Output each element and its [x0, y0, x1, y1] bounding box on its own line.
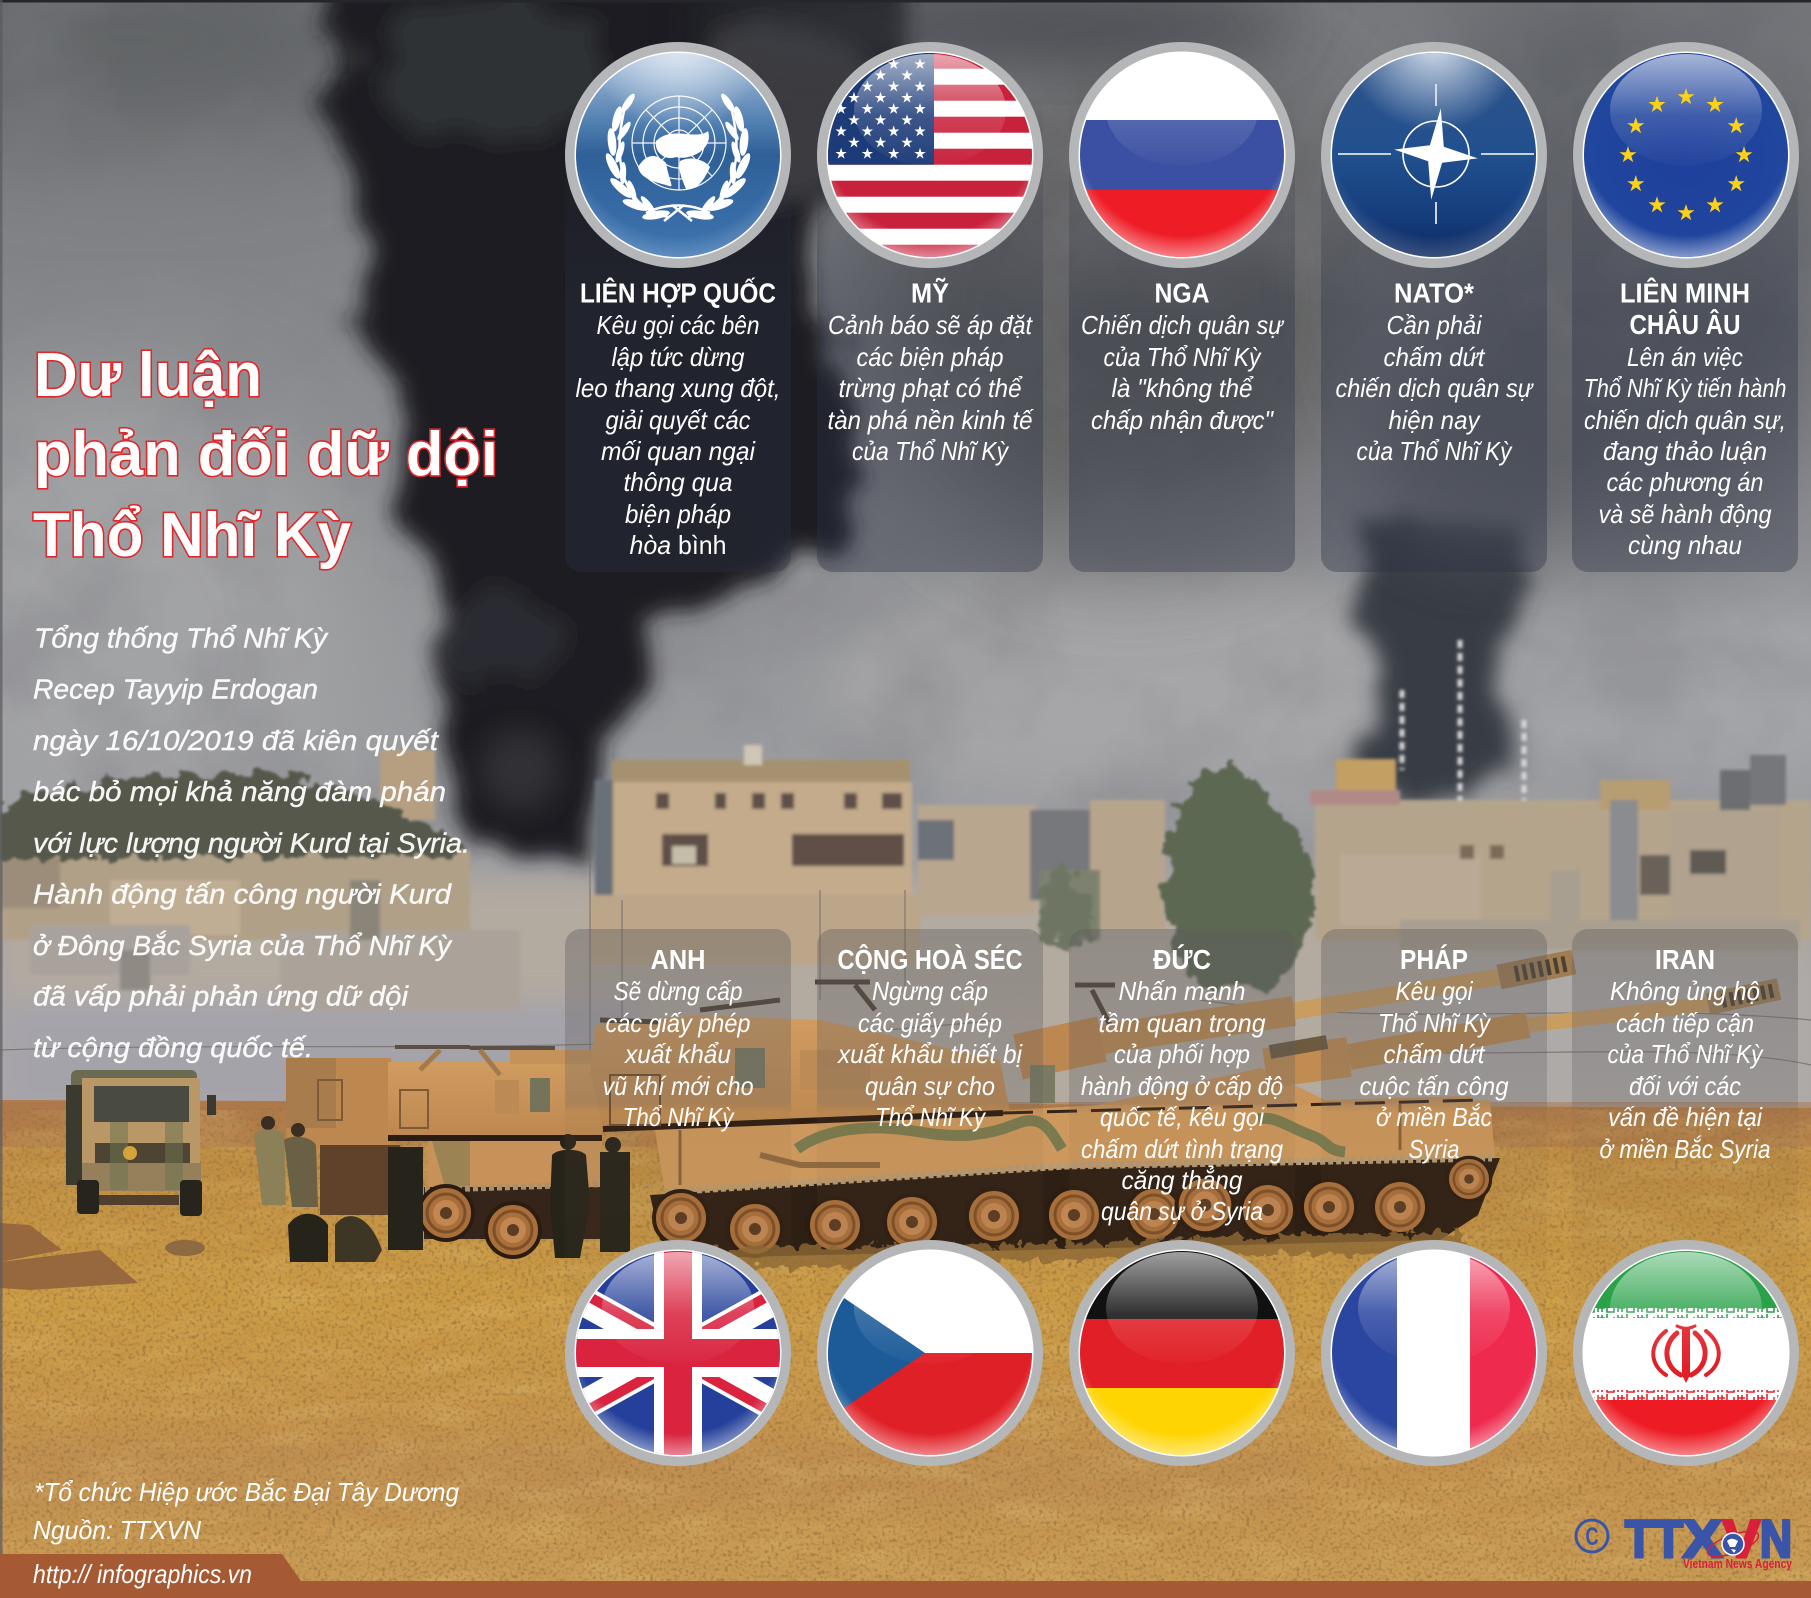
intro text block: Recep Tayyip Erdogan	[33, 674, 318, 705]
text block: tàn phá nền kinh tế	[828, 405, 1034, 435]
icon: Iran flag	[1573, 1240, 1799, 1466]
footer bar with website	[0, 1554, 1811, 1598]
text block	[828, 310, 1034, 466]
text block: leo thang xung đột,	[576, 373, 780, 403]
heading: ANH	[650, 944, 706, 975]
title: Dư luận	[34, 341, 262, 410]
text block	[576, 310, 780, 560]
intro text block: Tổng thống Thổ Nhĩ Kỳ	[34, 622, 329, 654]
logo: TTXVN Vietnam News Agency: X	[1683, 1510, 1722, 1569]
text block: của Thổ Nhĩ Kỳ	[1104, 342, 1262, 372]
text block: hiện nay	[1388, 405, 1481, 435]
text block: Ngừng cấp	[872, 976, 988, 1006]
heading: CHÂU ÂU	[1630, 309, 1740, 340]
intro text block: Hành động tấn công người Kurd	[33, 878, 452, 910]
text block: mối quan ngại	[601, 436, 756, 466]
text block: của Thổ Nhĩ Kỳ	[852, 436, 1010, 466]
foreground tanks	[590, 962, 1779, 1258]
icon: UK flag	[565, 1240, 791, 1466]
truck	[66, 1070, 216, 1216]
far town	[0, 880, 1811, 1120]
text block: thông qua	[624, 467, 732, 497]
text block: Lên án việc	[1627, 342, 1743, 372]
icon: US flag	[817, 42, 1043, 268]
text block: hành động ở cấp độ	[1081, 1071, 1283, 1101]
tarps	[0, 1223, 138, 1290]
text block: xuất khẩu	[623, 1039, 731, 1069]
text block	[1081, 310, 1284, 435]
logo: TTXVN Vietnam News Agency: C	[1586, 1523, 1598, 1551]
title: phản đối dữ dội	[34, 420, 498, 489]
text block: Cần phải	[1386, 310, 1483, 340]
icon: France flag	[1321, 1240, 1547, 1466]
soldiers	[254, 1116, 630, 1262]
heading: MỸ	[911, 278, 949, 308]
text block: trừng phạt có thể	[838, 373, 1023, 403]
panel: Đức	[1069, 929, 1295, 1466]
icon: NATO flag	[1321, 42, 1547, 268]
intro text block: với lực lượng người Kurd tại Syria.	[33, 828, 470, 858]
text block	[1360, 976, 1509, 1164]
text block: Thổ Nhĩ Kỳ	[622, 1102, 735, 1132]
heading: LIÊN MINH	[1620, 278, 1750, 308]
text block: các phương án	[1606, 467, 1764, 497]
text block: lập tức dừng	[612, 342, 745, 372]
text block: chấm dứt	[1384, 1039, 1486, 1069]
intro text block: bác bỏ mọi khả năng đàm phán	[33, 776, 446, 807]
heading: NATO*	[1394, 278, 1474, 308]
text block: Chiến dịch quân sự	[1081, 310, 1284, 340]
text block: các biện pháp	[856, 342, 1004, 372]
main black smoke plume	[335, 0, 915, 850]
intro text block: ngày 16/10/2019 đã kiên quyết	[33, 725, 439, 756]
heading: IRAN	[1655, 944, 1715, 975]
right smoke plume	[1363, 500, 1525, 780]
panel: Mỹ	[817, 42, 1043, 572]
text block: đang thảo luận	[1603, 436, 1767, 466]
text block: cách tiếp cận	[1616, 1008, 1754, 1038]
heading: CỘNG HOÀ SÉC	[838, 943, 1022, 975]
heading: NGA	[1154, 278, 1210, 308]
text block: Thổ Nhĩ Kỳ	[1378, 1008, 1492, 1038]
logo: TTXVN Vietnam News Agency: T	[1654, 1510, 1683, 1569]
text block: quân sự ở Syria	[1101, 1196, 1263, 1226]
text block: ở miền Bắc	[1376, 1102, 1492, 1132]
text block: chiến dịch quân sự	[1336, 373, 1534, 403]
text block: cùng nhau	[1628, 530, 1742, 560]
text block: căng thẳng	[1122, 1165, 1243, 1195]
text block: vấn đề hiện tại	[1608, 1102, 1763, 1132]
right town	[1315, 800, 1811, 940]
icon: UN flag	[565, 42, 791, 268]
intro text block: ở Đông Bắc Syria của Thổ Nhĩ Kỳ	[33, 930, 453, 961]
panel: Cộng hoà Séc	[775, 929, 1043, 1466]
panel: NATO	[1321, 5, 1547, 572]
intro text block	[33, 622, 470, 1063]
text block: của phối hợp	[1114, 1039, 1250, 1069]
panel: Pháp	[1321, 929, 1547, 1466]
text block: quân sự cho	[865, 1071, 995, 1101]
text block: các giấy phép	[606, 1008, 750, 1038]
text block: Kêu gọi các bên	[596, 310, 760, 340]
text block	[602, 976, 754, 1132]
text block: Kêu gọi	[1396, 976, 1474, 1006]
icon: Czech flag	[775, 1240, 1043, 1466]
text block: của Thổ Nhĩ Kỳ	[1356, 436, 1513, 466]
text block: chấm dứt	[1384, 342, 1486, 372]
heading: ĐỨC	[1153, 944, 1211, 975]
panel: Anh	[565, 929, 791, 1466]
text block: quốc tế, kêu gọi	[1100, 1102, 1265, 1132]
text block	[836, 976, 1023, 1132]
rear tanks	[286, 1047, 605, 1257]
text block: vũ khí mới cho	[602, 1071, 754, 1101]
text block: hòa bình	[630, 530, 726, 560]
panel: Liên Hợp Quốc	[565, 5, 791, 572]
icon: Germany flag	[1069, 1240, 1295, 1466]
logo: TTXVN Vietnam News Agency: N	[1760, 1510, 1792, 1569]
text block: Cảnh báo sẽ áp đặt	[828, 310, 1034, 340]
text block: Thổ Nhĩ Kỳ	[875, 1102, 987, 1132]
footer bar with website: http:// infographics.vn	[33, 1559, 252, 1589]
panel: Liên minh châu Âu	[1572, 42, 1799, 572]
logo: TTXVN Vietnam News Agency: V	[1723, 1510, 1760, 1569]
panel: Nga	[1069, 42, 1295, 572]
title	[33, 341, 498, 570]
title: Thổ Nhĩ Kỳ	[33, 501, 351, 570]
intro text block: đã vấp phải phản ứng dữ dội	[33, 980, 409, 1012]
heading: LIÊN HỢP QUỐC	[580, 276, 776, 308]
text block: ở miền Bắc Syria	[1600, 1134, 1770, 1164]
heading	[1620, 278, 1750, 340]
dry grass in front of tanks	[640, 1232, 1470, 1272]
text block: đối với các	[1629, 1071, 1741, 1101]
text block: của Thổ Nhĩ Kỳ	[1608, 1039, 1764, 1069]
text block: các giấy phép	[858, 1008, 1002, 1038]
icon: Russia flag	[1069, 42, 1295, 268]
text block: Syria	[1408, 1134, 1460, 1164]
text block: tầm quan trọng	[1098, 1008, 1266, 1038]
text block	[1600, 976, 1770, 1164]
trees	[0, 765, 1314, 990]
text block: Nhấn mạnh	[1118, 976, 1246, 1006]
heading: PHÁP	[1400, 944, 1468, 975]
text block	[1081, 976, 1283, 1226]
text block: Không ủng hộ	[1610, 976, 1760, 1006]
text block: xuất khẩu thiết bị	[836, 1039, 1023, 1069]
text block: là "không thể	[1112, 373, 1254, 403]
text block: giải quyết các	[606, 405, 750, 435]
logo: TTXVN Vietnam News Agency	[1576, 1510, 1793, 1571]
text block	[1584, 342, 1786, 560]
footnote and source: Nguồn: TTXVN	[33, 1515, 201, 1545]
text block: cuộc tấn công	[1360, 1071, 1509, 1101]
text block: chiến dịch quân sự,	[1584, 405, 1786, 435]
footnote and source: *Tổ chức Hiệp ước Bắc Đại Tây Dương	[34, 1477, 459, 1507]
panel: Iran	[1572, 929, 1799, 1466]
desert ground	[0, 1100, 1811, 1598]
text block: biện pháp	[625, 499, 731, 529]
text block	[1336, 310, 1534, 466]
intro text block: từ cộng đồng quốc tế.	[33, 1032, 313, 1063]
text block: Sẽ dừng cấp	[614, 976, 742, 1006]
icon: EU flag	[1573, 42, 1799, 268]
logo: TTXVN Vietnam News Agency: T	[1625, 1510, 1653, 1569]
text block: chấm dứt tình trạng	[1081, 1134, 1283, 1164]
text block: và sẽ hành động	[1598, 499, 1772, 529]
footnote and source	[33, 1477, 459, 1545]
text block: chấp nhận được"	[1091, 405, 1275, 435]
building A	[612, 760, 910, 782]
